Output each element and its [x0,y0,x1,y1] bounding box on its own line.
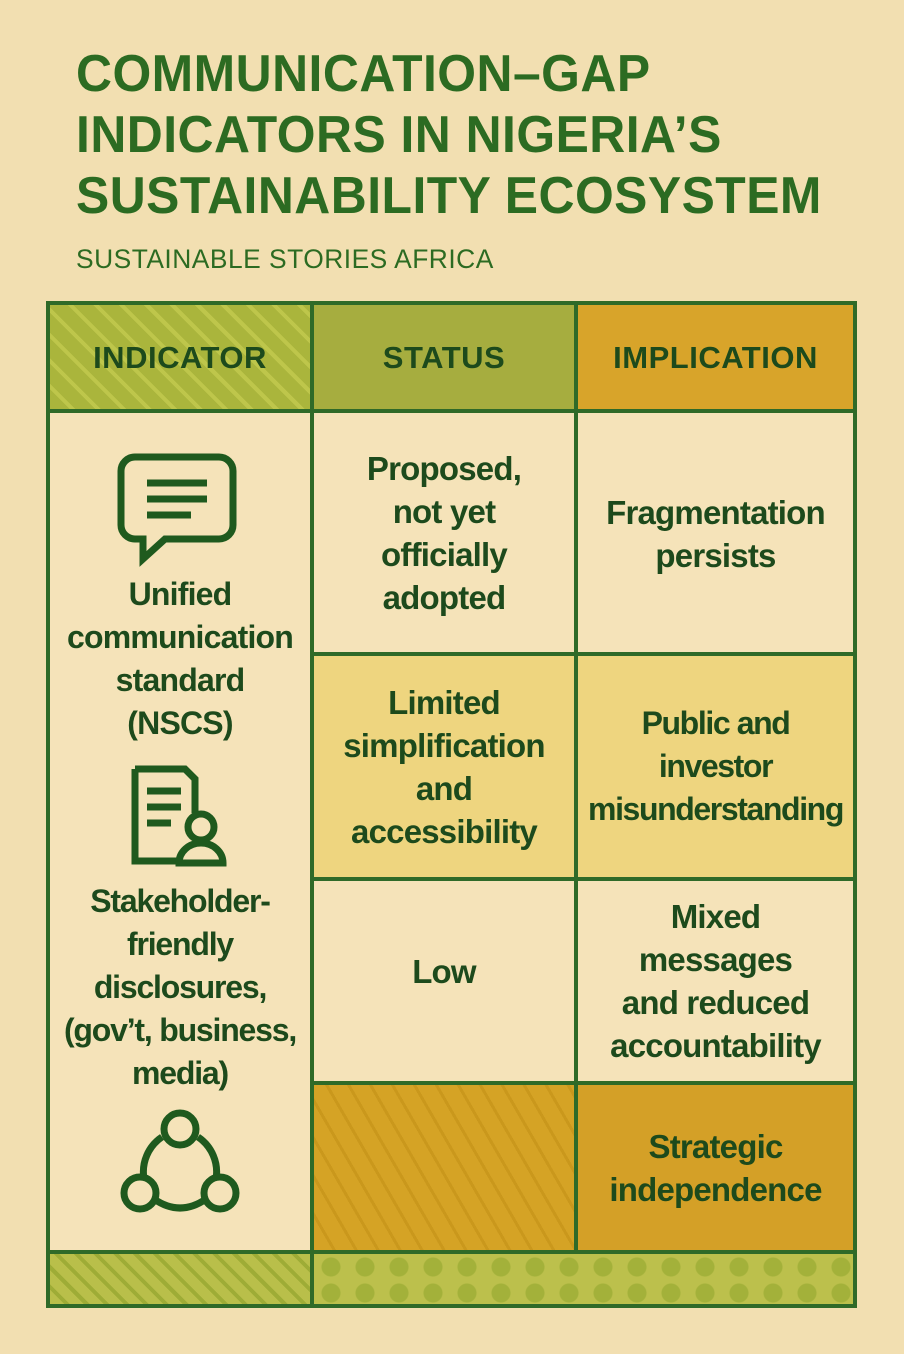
title [76,45,822,225]
row1 status [310,409,578,656]
row2 implication: investor [659,748,772,784]
text: stakeholder disclosures: friendly [127,926,233,962]
title: SUSTAINABILITY ECOSYSTEM [76,167,822,225]
indicator column [46,409,314,1254]
row3 implication [574,877,857,1085]
text: stakeholder disclosures: disclosures, [94,969,266,1005]
title: INDICATORS IN NIGERIA’S [76,106,722,164]
row3 implication: Mixed [671,898,760,935]
row3 status: Low [412,952,476,990]
icon: network [120,1110,240,1212]
text: stakeholder disclosures: Stakeholder- [90,883,270,919]
text: stakeholder disclosures: (gov’t, business, [64,1012,296,1048]
icon: chat bubble [118,454,236,567]
row4 implication [574,1081,857,1254]
header: status [310,301,578,413]
header: indicator [46,301,314,413]
row2 status: simplification [343,726,545,764]
footer pattern right [310,1250,857,1308]
footer pattern left [46,1250,314,1308]
row2 implication: misunderstanding [588,791,843,827]
row3 implication: messages [639,941,792,978]
row1 status: adopted [383,578,505,616]
header: implication: IMPLICATION [613,340,818,374]
row1 status: officially [381,536,507,572]
header: status: STATUS [383,340,505,374]
row1 status: Proposed, [367,450,521,486]
row2 status: Limited [388,684,500,720]
row1 status: not yet [393,492,495,530]
row1 implication: persists [655,537,776,574]
text: unified standard: standard [116,662,244,698]
text: unified standard [67,576,293,741]
row4 status pattern [310,1081,578,1254]
header: implication [574,301,857,413]
text: unified standard: Unified [129,576,231,612]
row2 status [310,652,578,881]
row2 implication [574,652,857,881]
text: stakeholder disclosures [64,883,296,1091]
row1 implication [574,409,857,656]
row2 status: and [416,770,472,806]
row3 implication: and reduced [622,984,809,1021]
table [46,301,857,1308]
row4 implication: Strategic [648,1128,783,1164]
row2 implication: Public and [642,705,789,741]
row3 status [310,877,578,1085]
row2 status: accessibility [351,812,537,850]
row4 implication: independence [609,1170,822,1208]
subtitle: SUSTAINABLE STORIES AFRICA [76,244,494,274]
row3 implication: accountability [610,1027,821,1064]
text: unified standard: communication [67,619,293,655]
header: indicator: INDICATOR [93,340,267,374]
title: COMMUNICATION–GAP [76,45,651,103]
row1 implication: Fragmentation [606,494,825,531]
icon: document person [132,766,226,866]
text: unified standard: (NSCS) [127,705,233,741]
text: stakeholder disclosures: media) [132,1055,228,1091]
